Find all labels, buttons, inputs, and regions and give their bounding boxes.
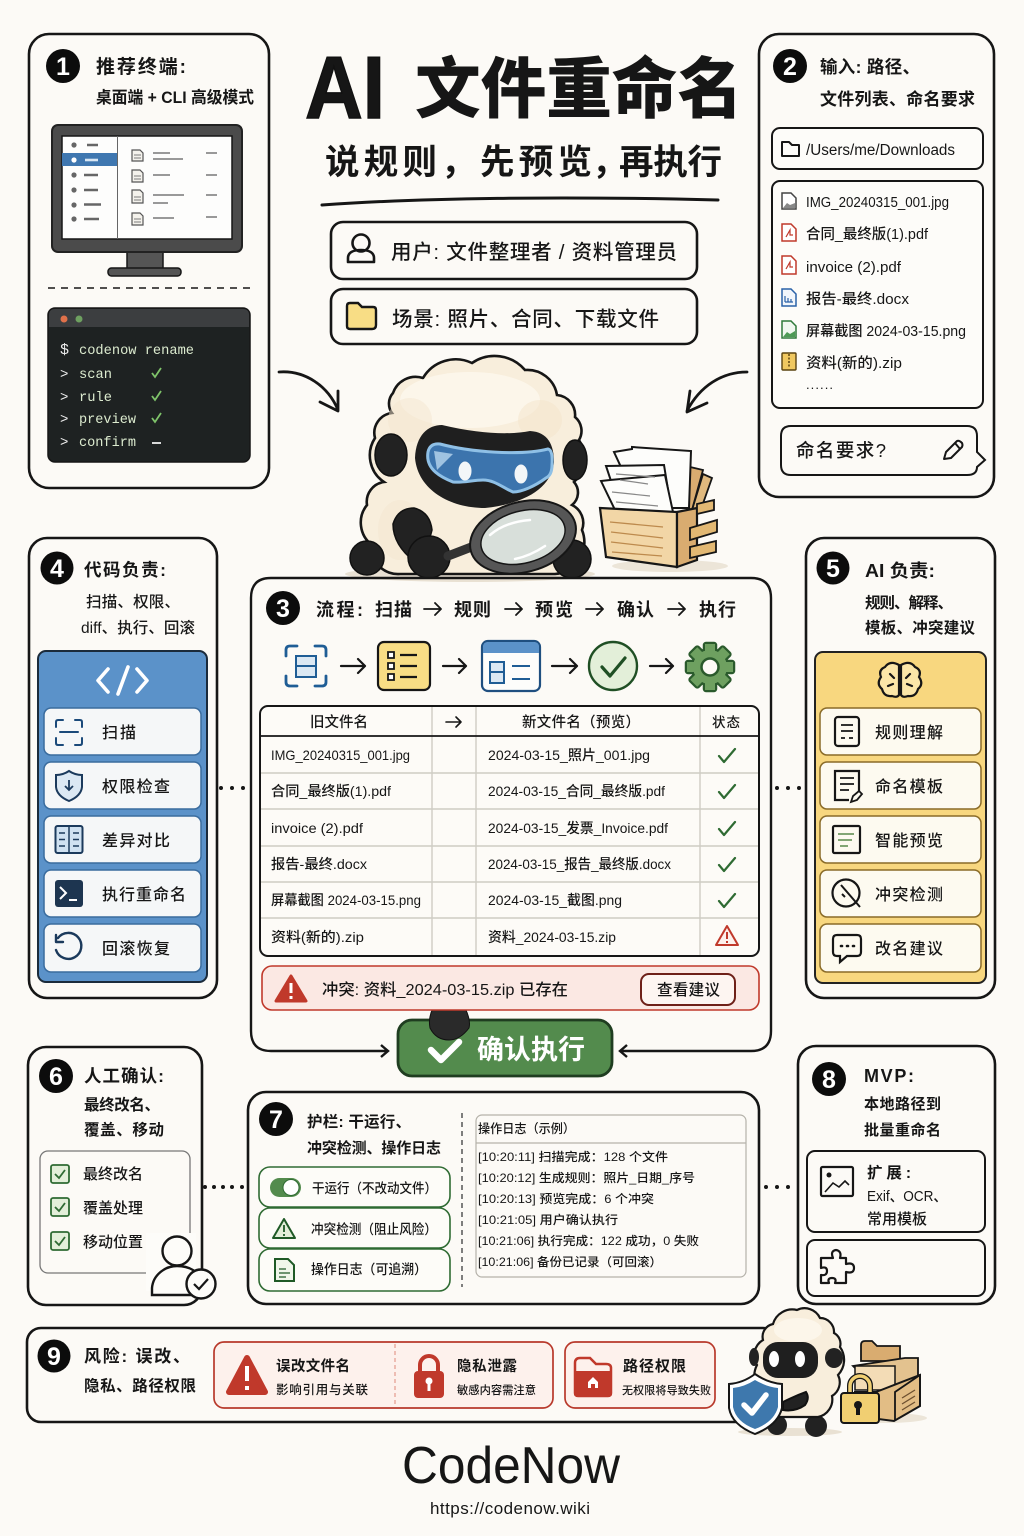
heading 7: 冲突检测、操作日志 [307,1139,441,1157]
face and goggles [415,425,554,508]
item: dry run: 干运行（不改动文件） [312,1180,437,1196]
url: https://codenow.wiki [430,1499,590,1518]
icon: desktop monitor [52,125,242,276]
heading 1: 桌面端 + CLI 高级模式 [96,87,254,107]
table rows [271,747,671,945]
heading 9: 风险: 误改、 [84,1346,190,1366]
heading 6: 覆盖、移动 [84,1121,164,1139]
panel 9: risks [27,1328,777,1422]
icon: box with padlock [841,1341,927,1423]
file list: 屏幕截图 2024-03-15.png [806,323,966,340]
item: conflict detection: 冲突检测 [875,886,943,904]
table rows: IMG_20240315_001.jpg [271,747,410,763]
terminal window: confirm [79,435,136,451]
item: execute rename [44,870,201,917]
item: diff compare: 差异对比 [102,832,170,850]
file list: IMG_20240315_001.jpg [806,195,949,211]
item: rule understanding [820,708,981,755]
badge 1 [46,49,80,83]
item: scan: 扫描 [102,724,136,742]
path field [772,128,983,169]
file list: 资料(新的).zip [806,355,902,372]
AI stack [815,652,986,983]
icon: image [821,1167,853,1196]
terminal window: rule [79,390,112,406]
button: view suggestions: 查看建议 [657,981,720,999]
risk card: mistaken rename and privacy: 隐私泄露 [457,1358,518,1375]
operation log panel: [10:20:12] 生成规则：照片_日期_序号 [478,1170,695,1185]
item: rollback [44,924,201,972]
path field: /Users/me/Downloads [806,142,955,159]
heading 6: 人工确认: [84,1066,164,1086]
operation log panel [476,1115,746,1277]
heading 5 [865,561,975,637]
table rows: 合同_最终版(1).pdf [271,783,391,799]
flow heading [316,600,736,620]
item: smart preview: 智能预览 [875,832,943,850]
item: operation log [259,1249,450,1291]
icon: zip file [782,353,796,370]
item: operation log: 操作日志（可追溯） [311,1262,427,1277]
icon: pencil [944,441,962,459]
terminal window: preview [79,412,137,428]
item: rule understanding: 规则理解 [875,724,943,742]
icon: rule list [378,642,430,690]
table header: 新文件名（预览） [522,713,640,731]
terminal window: $ [60,342,69,359]
operation log panel: [10:20:13] 预览完成：6 个冲突 [478,1191,654,1206]
icon: scan [286,646,326,686]
checklist [40,1151,190,1273]
subtitle [322,144,722,205]
flow heading: 预览 [535,600,573,620]
flow heading: 规则 [454,600,491,620]
icon: warning [276,976,306,1001]
table rows: 2024-03-15_报告_最终版.docx [488,856,671,872]
connector dots: human to guardrail [203,1185,244,1189]
mascot: sheep with shield [729,1308,844,1437]
item: rename suggestion [820,924,981,972]
status checks [719,749,735,907]
terminal window: > [60,390,68,406]
panel 6: human confirmation [28,1047,216,1305]
icon: png file [782,321,796,338]
heading 5: 规则、解释、 [865,594,953,612]
panel 3: flow [251,578,771,1076]
badge 1: 1 [56,53,70,81]
table rows: invoice (2).pdf [271,820,363,836]
badge 4: 4 [50,555,64,583]
icon: confirm check [589,642,637,690]
panel 5: AI responsibilities [806,538,995,998]
terminal window: > [60,367,68,383]
panel 4: code responsibilities [29,538,217,998]
icon: preview window [482,641,540,691]
terminal window: codenow rename [79,343,194,359]
heading 4: 扫描、权限、 [86,593,180,611]
heading 1: 推荐终端: [96,56,186,78]
connector dots: guardrail to MVP [764,1185,790,1189]
table header [310,713,740,731]
heading 8: 本地路径到 [864,1095,941,1113]
heading 4 [81,560,195,637]
table rows: 2024-03-15_合同_最终版.pdf [488,783,665,799]
risk card: mistaken rename and privacy [214,1342,553,1408]
badge 3 [266,591,300,625]
risk card: path permission: 无权限将导致失败 [622,1383,711,1397]
icon: user [348,234,374,262]
icon: code [98,667,147,694]
operation log panel: [10:21:06] 执行完成：122 成功，0 失败 [478,1233,699,1248]
item: permission check: 权限检查 [102,778,170,796]
mascot: sheep with magnifier [345,356,595,585]
flow heading: 扫描 [375,600,412,620]
panel 7: guardrails [248,1092,759,1304]
connector dots: code to flow [219,786,245,790]
magnifier [448,489,584,585]
icon: document box [600,447,728,572]
risk card: mistaken rename and privacy: 敏感内容需注意 [457,1383,536,1397]
icon: docx file [782,289,796,306]
plugin box [807,1240,985,1296]
heading 9 [84,1346,196,1395]
arrow: terminal to mascot [279,372,338,411]
item: diff compare [44,816,201,863]
panel 1: terminal recommendation [29,34,269,488]
badge 9: 9 [47,1343,61,1371]
item: scan [44,708,201,755]
icon: brain [879,663,921,697]
subtitle: 再执行 [619,144,722,182]
file list: 报告-最终.docx [806,291,910,308]
extension box: 常用模板 [867,1210,927,1228]
extension box: Exif、OCR、 [867,1188,947,1205]
file list: invoice (2).pdf [806,260,902,276]
operation log panel: [10:20:11] 扫描完成：128 个文件 [478,1149,668,1164]
operation log panel: 操作日志（示例） [478,1121,575,1136]
heading 8: MVP: [864,1066,914,1086]
icon: image file [782,193,796,209]
icon: pdf file 2 [782,256,796,274]
operation log panel: [10:21:06] 备份已记录（可回滚） [478,1254,662,1269]
icon row: process steps [286,641,734,691]
item: naming template: 命名模板 [875,777,943,796]
heading 8: 批量重命名 [864,1121,941,1139]
item: naming template [820,762,981,809]
extension box: 扩展: [867,1163,911,1182]
icon: shield [729,1374,782,1434]
subtitle: ， [592,144,626,182]
table header: 旧文件名 [310,713,368,731]
subtitle: ， [441,144,476,182]
speech bubble: naming request: 命名要求? [796,440,886,461]
ears [375,434,587,480]
icon: gear [686,643,734,691]
table rows: 资料_2024-03-15.zip [488,929,616,945]
heading 2: 输入: 路径、 [820,57,920,77]
icon: user with check [146,1233,216,1298]
icon: folder lock [575,1358,611,1396]
table rows: 2024-03-15_发票_Invoice.pdf [488,820,668,836]
badge 2 [773,49,807,83]
badge 4 [40,552,74,584]
icon: warning triangle [229,1358,265,1392]
code stack [38,651,207,982]
panel: user role [331,222,697,279]
status warning [716,926,738,945]
risk card: path permission: 路径权限 [623,1357,686,1375]
checklist: 最终改名 [83,1166,143,1183]
risk card: mistaken rename and privacy: 影响引用与关联 [276,1382,368,1397]
item: permission check [44,762,201,809]
panel: scenario [331,289,697,344]
table rows: 资料(新的).zip [271,929,364,945]
title: 文件重命名 [415,52,743,126]
heading 7 [307,1113,441,1157]
flow heading: 执行 [699,600,736,620]
button: view suggestions [641,974,735,1005]
panel 8: MVP [798,1046,995,1304]
item: conflict check: 冲突检测（阻止风险） [311,1221,437,1237]
button: confirm execute [398,1008,612,1076]
extension box [807,1151,985,1232]
heading 8 [864,1066,941,1139]
conflict bar: 冲突: 资料_2024-03-15.zip 已存在 [322,981,568,999]
item: execute rename: 执行重命名 [102,885,186,904]
heading 5: AI 负责: [865,561,935,581]
heading 4: diff、执行、回滚 [81,619,195,637]
panel 2: input [759,34,994,497]
badge 7: 7 [269,1106,283,1134]
conflict bar [262,966,759,1010]
risk card: path permission [565,1342,715,1408]
item: rollback: 回滚恢复 [102,940,170,958]
badge 9 [38,1340,70,1372]
panel: user role: 用户: 文件整理者 / 资料管理员 [391,241,677,264]
subtitle: 先预览 [480,144,592,182]
speech bubble: naming request [781,426,985,475]
file list: 合同_最终版(1).pdf [806,226,929,243]
icon: pdf file [782,224,796,241]
title: AI [305,38,385,137]
heading 5: 模板、冲突建议 [865,618,975,637]
heading 1 [96,56,254,107]
item: conflict detection [820,870,981,917]
heading 7: 护栏: 干运行、 [307,1113,411,1131]
table rows: 报告-最终.docx [271,856,367,872]
terminal window: > [60,435,68,451]
heading 9: 隐私、路径权限 [84,1376,196,1395]
checklist: 移动位置 [83,1233,143,1251]
icon: lock [414,1356,444,1398]
table rows: 2024-03-15_照片_001.jpg [488,747,650,763]
item: conflict check [259,1208,450,1248]
heading 2: 文件列表、命名要求 [820,89,975,109]
icon: folder [347,303,376,329]
checklist: 覆盖处理 [83,1200,143,1217]
arrow: input to mascot [687,372,747,412]
item: rename suggestion: 改名建议 [875,940,943,958]
table header: 状态 [712,714,740,730]
heading 6 [84,1066,164,1139]
logo: CodeNow: CodeNow [402,1437,620,1495]
badge 5 [816,552,850,584]
arms and feet [350,508,591,578]
button: confirm execute: 确认执行 [477,1035,585,1065]
table rows: 屏幕截图 2024-03-15.png [271,892,421,908]
rename preview table [260,706,759,956]
icon: puzzle [821,1250,854,1283]
connector dots: flow to AI [775,786,801,790]
badge 5: 5 [826,555,840,583]
badge 8 [812,1062,846,1096]
item: dry run [259,1167,450,1207]
item: smart preview [820,816,981,863]
operation log panel: [10:21:05] 用户确认执行 [478,1212,618,1227]
badge 2: 2 [783,53,797,81]
heading 4: 代码负责: [84,560,166,580]
table rows: 2024-03-15_截图.png [488,892,622,908]
heading 6: 最终改名、 [84,1096,160,1114]
terminal window: scan [79,367,112,383]
flow heading: 流程: [316,600,363,620]
terminal window [48,308,250,462]
title [305,38,743,137]
badge 3: 3 [276,595,290,623]
badge 6 [39,1059,73,1093]
flow heading: 确认 [617,600,654,620]
terminal window: > [60,412,68,428]
panel: scenario: 场景: 照片、合同、下载文件 [392,308,659,331]
badge 6: 6 [49,1063,63,1091]
heading 2 [820,57,975,109]
file list: ...... [806,377,833,392]
subtitle: 说规则 [325,144,437,182]
risk card: mistaken rename and privacy: 误改文件名 [276,1357,350,1375]
file list [772,181,983,408]
badge 7 [259,1102,293,1136]
badge 8: 8 [822,1066,836,1094]
